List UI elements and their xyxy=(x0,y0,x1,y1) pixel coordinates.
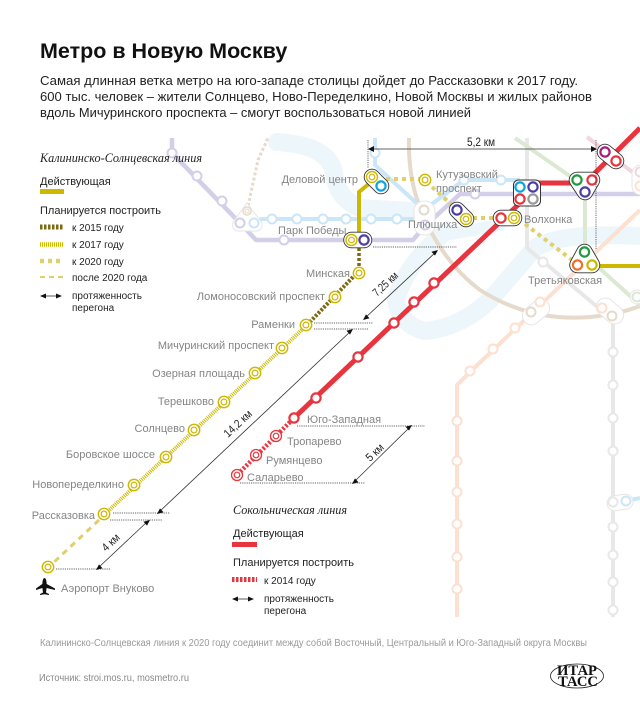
legend row: 2015 xyxy=(40,223,124,234)
light green line xyxy=(515,138,640,305)
legend row: after 2020: после 2020 года xyxy=(72,273,148,284)
station labels: Аэропорт Внуково xyxy=(61,583,154,595)
station labels xyxy=(32,169,602,595)
icon: airplane xyxy=(36,578,55,595)
station labels: Юго-Западная xyxy=(307,414,381,426)
station labels: Волхонка xyxy=(524,214,573,226)
beige ring line xyxy=(409,138,640,318)
legend row: span: перегона xyxy=(264,606,307,617)
legend row: 2017: к 2017 году xyxy=(72,240,124,251)
logo: ITAR-TASS: ИТАР xyxy=(557,663,597,679)
station labels: Раменки xyxy=(251,319,295,331)
river background xyxy=(277,142,640,331)
station labels: Ломоносовский проспект xyxy=(197,291,325,303)
footnote: Калининско-Солнцевская линия к 2020 году соединит между собой Восточный, Центральный и Юго-Западный округа Москвы xyxy=(40,637,587,649)
after 2020 dashed line xyxy=(52,520,99,564)
interchange: Tretyakovskaya xyxy=(573,247,597,270)
station labels: Кутузовский xyxy=(436,169,498,181)
planned red stations xyxy=(232,430,282,480)
dimension: 14,2 km xyxy=(157,329,353,514)
intro text xyxy=(40,73,592,120)
purple line xyxy=(172,138,640,240)
interchange: four lines xyxy=(514,180,540,206)
legend: Kalininsko-Solntsevskaya line: Калининско-Солнцевская линия xyxy=(39,151,202,165)
station labels: Минская xyxy=(306,268,350,280)
peach line xyxy=(457,210,640,617)
yellow stations xyxy=(42,174,431,573)
legend row: span: протяженность xyxy=(264,594,334,605)
existing metro network background xyxy=(172,137,640,617)
solid yellow line xyxy=(359,182,640,266)
interchange: ring grey xyxy=(593,294,627,328)
dimension: 5,2 km xyxy=(368,137,597,152)
source: Источник: stroi.mos.ru, mosmetro.ru xyxy=(39,673,189,684)
interchange: three lines top xyxy=(572,175,597,197)
legend row: 2015: к 2015 году xyxy=(72,223,124,234)
dimension: 4 km xyxy=(96,520,150,570)
station labels: Румянцево xyxy=(266,455,322,467)
interchange: Plyushchikha xyxy=(414,201,435,235)
red stations xyxy=(289,278,439,423)
interchange: Park Pobedy xyxy=(346,234,369,246)
interchange: Delovoy tsentr xyxy=(366,172,386,191)
station labels: Третьяковская xyxy=(528,275,602,287)
interchange: ring peach xyxy=(519,295,553,329)
station labels: Мичуринский проспект xyxy=(158,340,274,352)
legend row: 2020 xyxy=(40,257,124,268)
legend: Sokolnicheskaya line: Действующая xyxy=(233,528,304,540)
legend row: span: протяженность xyxy=(72,291,142,302)
dimension leader lines xyxy=(56,140,596,569)
station labels: Плющиха xyxy=(408,219,458,231)
legend row: span xyxy=(40,291,142,314)
beige dashed line xyxy=(247,138,268,211)
dotted yellow line 2020 xyxy=(386,179,572,260)
station labels: Новопеределкино xyxy=(32,479,124,491)
interchange: Volkhonka xyxy=(496,212,520,224)
dimension: 5 km: 5 км xyxy=(364,442,387,464)
legend: Sokolnicheskaya line: Сокольническая линия xyxy=(233,503,347,517)
grey line xyxy=(527,138,613,617)
dimension: 5,2 km: 5,2 км xyxy=(467,137,495,149)
station labels: Озерная площадь xyxy=(152,368,245,380)
2015 line segment xyxy=(308,248,359,324)
station labels: Рассказовка xyxy=(32,510,96,522)
dimension: 7,25 km xyxy=(363,250,438,320)
light blue line xyxy=(254,138,520,222)
interchange: Plyushchikha new xyxy=(452,205,472,224)
title: Метро в Новую Москву xyxy=(40,39,287,63)
legend: Kalininsko-Solntsevskaya line: Действующая xyxy=(40,176,111,188)
intro text: Самая длинная ветка метро на юго-западе столицы дойдет до Рассказовки к 2017 году. xyxy=(40,73,578,88)
legend: Sokolnicheskaya line xyxy=(232,503,354,617)
legend row: 2017 xyxy=(40,240,124,251)
interchange: ring green xyxy=(630,290,640,304)
logo: ITAR-TASS: ТАСС xyxy=(558,674,598,690)
logo: ITAR-TASS xyxy=(550,663,604,690)
dimension: 7,25 km: 7,25 км xyxy=(371,270,401,299)
pink line xyxy=(587,137,640,178)
interchange: north-east xyxy=(632,165,640,195)
intro text: вдоль Мичуринского проспекта – смогут воспользоваться новой линией xyxy=(40,105,471,120)
station labels: Тропарево xyxy=(287,436,341,448)
station labels: Солнцево xyxy=(135,423,185,435)
dimension: 4 km: 4 км xyxy=(100,532,123,554)
legend: Kalininsko-Solntsevskaya line xyxy=(39,151,202,314)
legend row: after 2020 xyxy=(40,273,148,284)
station labels: Терешково xyxy=(158,396,214,408)
station labels: Парк Победы xyxy=(278,225,347,237)
legend: Kalininsko-Solntsevskaya line: Планируется построить xyxy=(40,205,161,217)
station labels: Боровское шоссе xyxy=(66,449,155,461)
interchange: top right xyxy=(600,147,621,166)
legend row: span: перегона xyxy=(72,303,115,314)
pale stations xyxy=(168,148,618,614)
dimension: 14,2 km: 14,2 км xyxy=(222,408,255,440)
legend row: 2014: к 2014 году xyxy=(264,576,316,587)
2017 line segment xyxy=(104,326,306,515)
dimension: 5 km xyxy=(352,425,412,484)
interchange: south grey-blue xyxy=(606,493,634,512)
red line xyxy=(240,128,640,472)
legend row: 2020: к 2020 году xyxy=(72,257,124,268)
legend: Sokolnicheskaya line: Планируется построить xyxy=(233,557,354,569)
interchange: Kievskaya xyxy=(233,203,262,231)
station labels: Деловой центр xyxy=(282,174,358,186)
legend row: span xyxy=(232,594,334,617)
station labels: Саларьево xyxy=(247,472,304,484)
pale interchanges xyxy=(233,165,640,512)
intro text: 600 тыс. человек – жители Солнцево, Ново-Переделкино, Новой Москвы и жилых районов xyxy=(40,89,592,104)
station labels: проспект xyxy=(436,183,482,195)
